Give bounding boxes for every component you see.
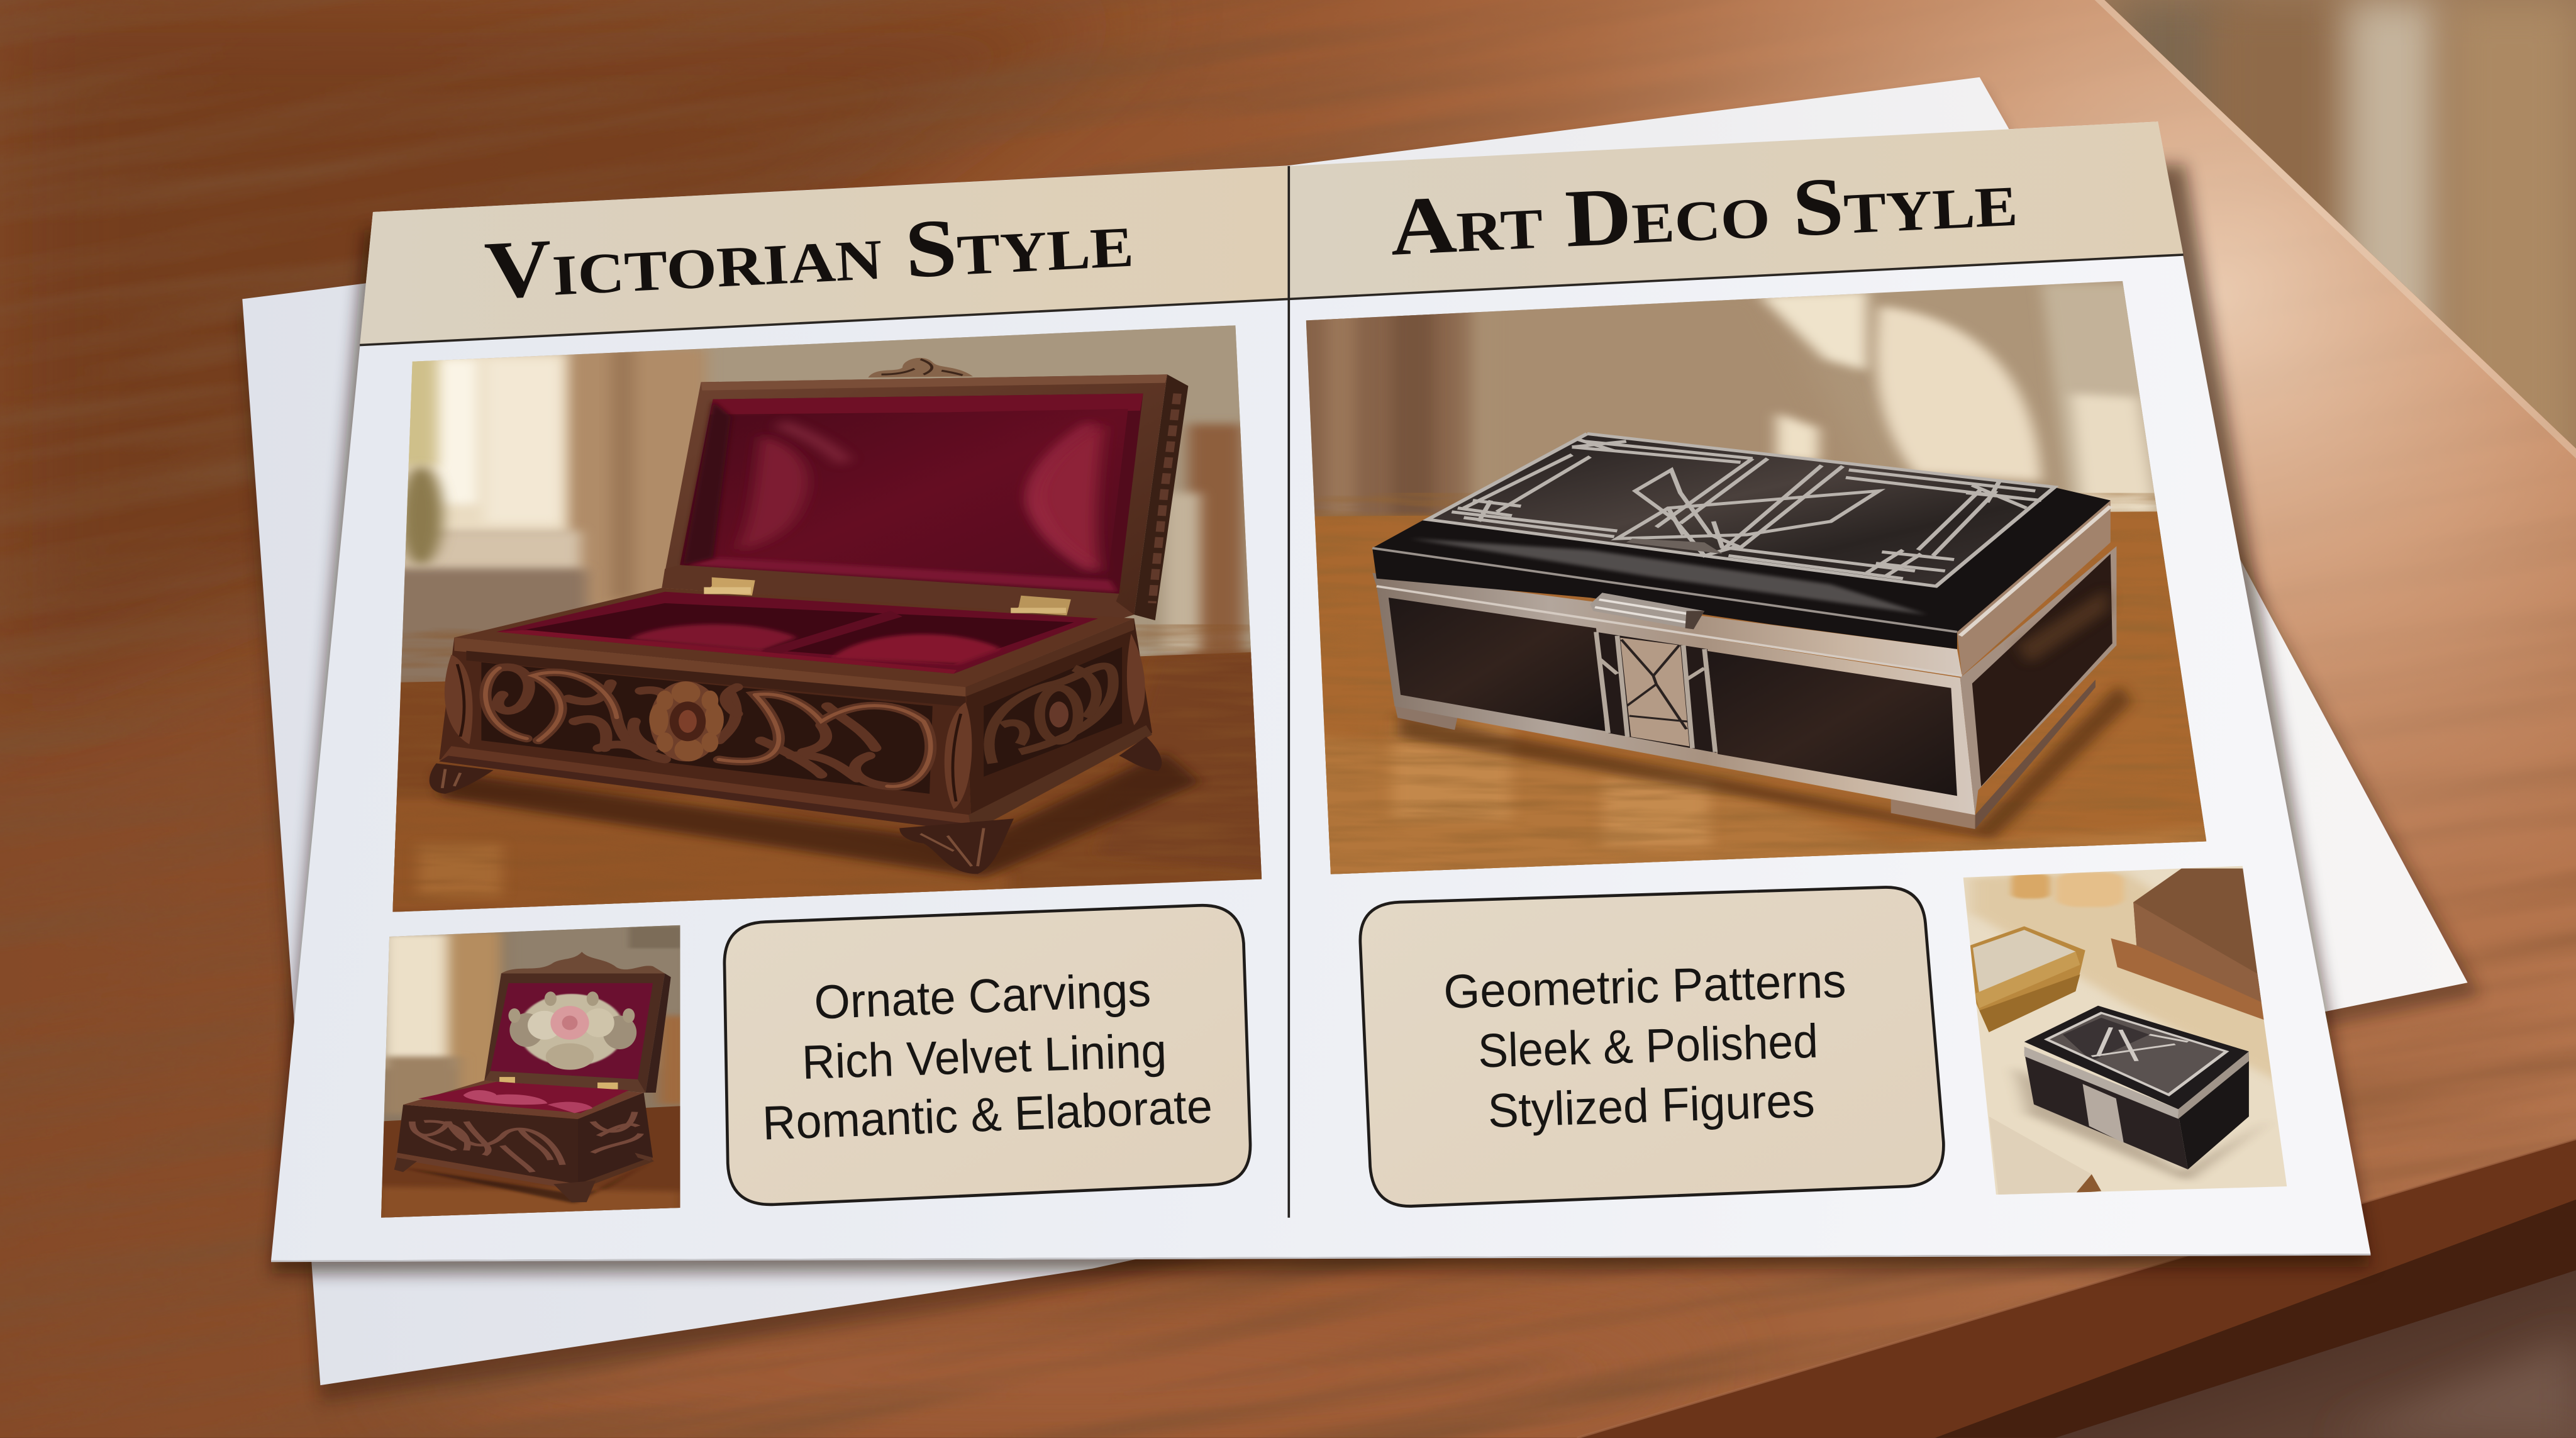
- cloth: [1989, 1117, 2092, 1196]
- velvet lid lining: [680, 394, 1143, 594]
- callout: Art Deco features: [1360, 888, 1943, 1207]
- box lid: [1372, 433, 2111, 676]
- lid bevel: [1372, 433, 2111, 649]
- front paper sheet: [271, 121, 2370, 1274]
- heading: Victorian Style: Victorian Style: [482, 194, 1135, 316]
- photo: Art Deco box: [1282, 272, 2246, 920]
- gold tray: [1970, 926, 2085, 1032]
- callout: Art Deco features: Geometric Patterns: [1443, 954, 1846, 1019]
- carved pilasters: [445, 633, 1145, 809]
- carved side panel: [984, 647, 1122, 777]
- heading: Art Deco Style: Art Deco Style: [1388, 153, 2019, 273]
- crest ornament: [868, 358, 973, 377]
- small lid: [484, 952, 671, 1093]
- callout: Victorian features: [724, 905, 1250, 1205]
- header band: Victorian Style: [360, 166, 1288, 345]
- velvet tray: [496, 592, 1098, 674]
- deco line work: [1428, 433, 2055, 586]
- thumbnail: Art Deco box on cream tray: [1950, 864, 2310, 1201]
- box body front: [1377, 586, 1975, 815]
- central geometric inlay: [1596, 632, 1716, 753]
- thumbnail: Victorian box with floral lining: [346, 917, 707, 1230]
- small deco box: [2014, 1006, 2272, 1181]
- callout: Victorian features: Romantic & Elaborate: [762, 1079, 1213, 1151]
- plinth: [439, 725, 1152, 832]
- carved rosette: [649, 681, 724, 761]
- header band: Art Deco Style: [1290, 121, 2184, 299]
- base of the box: [430, 577, 1162, 874]
- lid chrome band: [1372, 573, 1962, 676]
- carved front panel: [481, 662, 933, 794]
- photo: Victorian jewelry box: [392, 325, 1262, 912]
- ebony right panel: [1707, 651, 1957, 796]
- box body right side: [1960, 546, 2116, 815]
- hinges: [704, 577, 1071, 615]
- lid top panel: [1428, 433, 2055, 586]
- lid handle: [1590, 593, 1704, 629]
- carved feet: [430, 737, 1162, 874]
- embroidered floral: [508, 991, 636, 1070]
- ebony left panel: [1389, 598, 1605, 731]
- callout: Victorian features: Rich Velvet Lining: [801, 1024, 1167, 1090]
- callout: Art Deco features: Stylized Figures: [1487, 1074, 1816, 1138]
- callout: Victorian features: Ornate Carvings: [813, 963, 1152, 1030]
- callout: Art Deco features: Sleek & Polished: [1477, 1015, 1819, 1078]
- stacked wood boxes: [2111, 869, 2296, 1020]
- small base: [394, 1081, 654, 1202]
- box feet: [1394, 679, 2096, 829]
- box lid: [662, 358, 1188, 620]
